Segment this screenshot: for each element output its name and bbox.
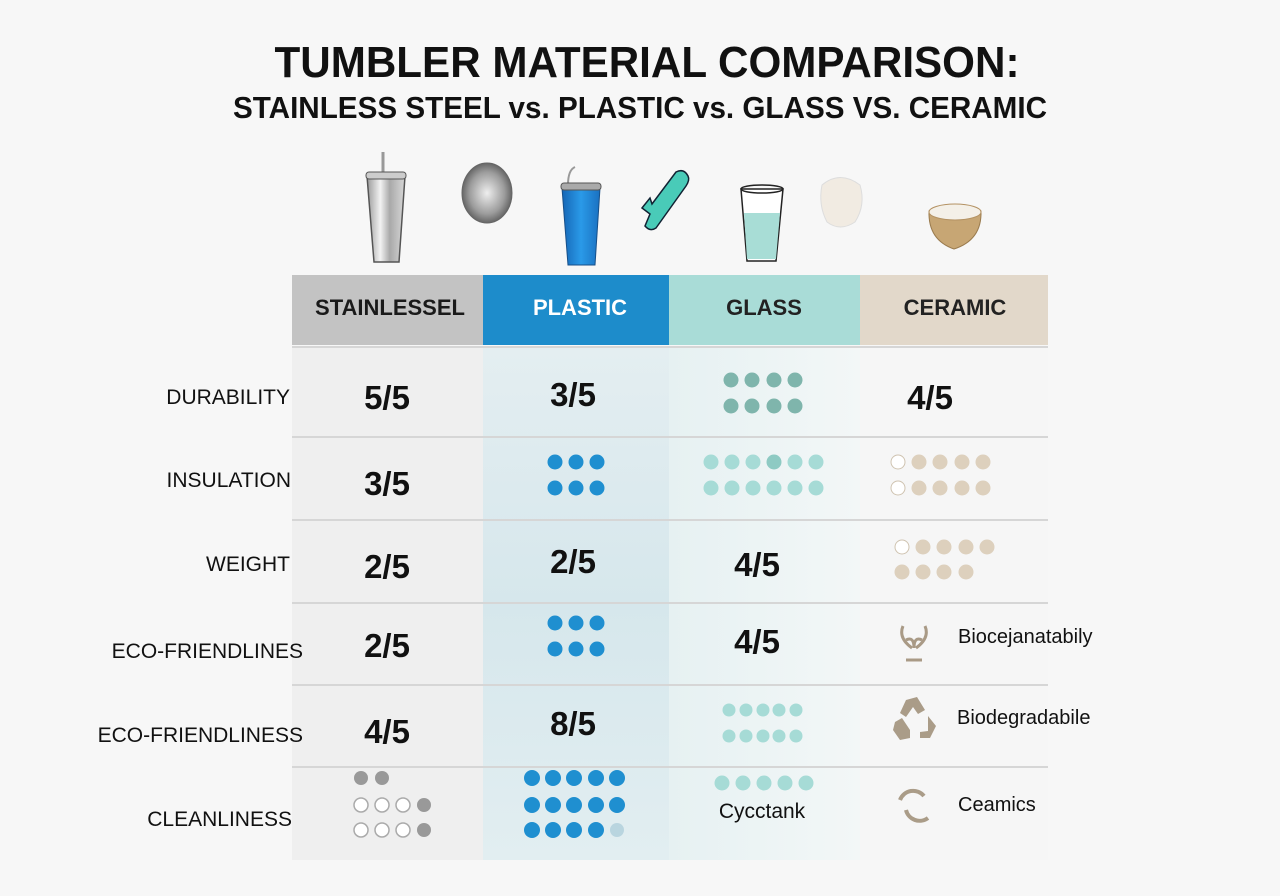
dots: glass durability <box>724 372 802 414</box>
ceramic cleanliness: cycle icon + text: Ceamics <box>958 794 1036 816</box>
table header: CERAMIC <box>904 295 1006 320</box>
icon: ceramic cup <box>821 178 862 227</box>
row labels: ECO-FRIENDLINES <box>112 640 303 663</box>
table header: STAINLESSEL <box>315 295 465 320</box>
dots: plastic cleanliness <box>524 770 625 838</box>
icon: steel disc <box>462 163 512 223</box>
row labels: DURABILITY <box>166 386 290 409</box>
icon: teal plastic piece <box>642 171 689 230</box>
icon: stainless tumbler <box>366 152 406 262</box>
ceramic eco 2: recycle icon + text <box>893 697 1090 740</box>
glass cleanliness: dots + text <box>714 776 814 823</box>
row labels <box>98 386 303 831</box>
score numbers: 3/5 <box>364 465 410 502</box>
column backgrounds <box>292 347 1048 860</box>
ceramic eco 1: leaf icon + text <box>902 626 1093 660</box>
dots: plastic insulation <box>548 454 604 496</box>
row labels: CLEANLINESS <box>147 808 292 831</box>
title <box>233 38 1047 125</box>
ceramic cleanliness: cycle icon + text <box>900 791 1036 821</box>
score numbers: 4/5 <box>734 623 780 660</box>
row labels: INSULATION <box>167 469 291 492</box>
glass cleanliness: dots + text: Cycctank <box>719 800 806 823</box>
dots: glass eco 2 <box>722 704 802 742</box>
row labels: ECO-FRIENDLINESS <box>98 724 303 747</box>
title: TUMBLER MATERIAL COMPARISON: <box>274 38 1020 87</box>
score numbers: 4/5 <box>364 713 410 750</box>
score numbers: 4/5 <box>907 379 953 416</box>
table header: PLASTIC <box>533 295 627 320</box>
score numbers: 5/5 <box>364 379 410 416</box>
icon: ceramic bowl <box>929 204 981 249</box>
dots: glass insulation <box>704 454 824 496</box>
score numbers <box>364 376 953 750</box>
title: STAINLESS STEEL vs. PLASTIC vs. GLASS VS. CERAMIC <box>233 90 1047 125</box>
dots: plastic eco <box>548 616 604 656</box>
score numbers: 2/5 <box>550 543 596 580</box>
dots: stainless cleanliness <box>354 771 431 837</box>
dots: ceramic insulation <box>891 454 990 496</box>
icon: glass of water <box>741 185 783 261</box>
ceramic eco 2: recycle icon + text: Biodegradabile <box>957 707 1090 729</box>
table header: GLASS <box>726 295 802 320</box>
dots: ceramic weight <box>894 540 994 580</box>
ceramic eco 1: leaf icon + text: Biocejanatabily <box>958 626 1093 648</box>
table header <box>292 275 1048 345</box>
score numbers: 3/5 <box>550 376 596 413</box>
icon: blue plastic tumbler <box>561 167 601 265</box>
score numbers: 2/5 <box>364 548 410 585</box>
row labels: WEIGHT <box>206 553 290 576</box>
score numbers: 8/5 <box>550 705 596 742</box>
score numbers: 4/5 <box>734 546 780 583</box>
score numbers: 2/5 <box>364 627 410 664</box>
